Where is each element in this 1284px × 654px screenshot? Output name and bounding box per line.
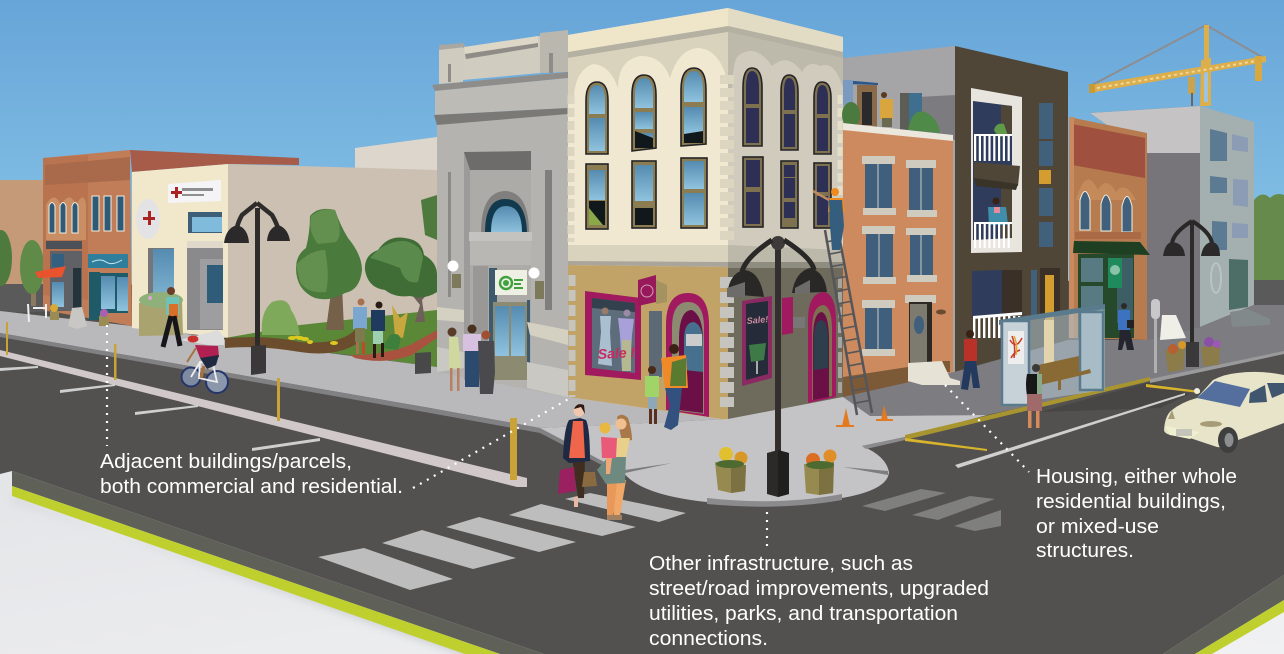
callout: adjacent buildings [100,451,403,498]
child and man with backpack entering shop [645,344,688,430]
bus stop sign, sandwich board, street lamp and planters right [1151,221,1221,373]
curb bollards and cyclist lane divider [0,322,527,487]
ground floor [972,270,1002,318]
scalloped arch band, side face [728,32,843,90]
callout: housing [1036,466,1237,562]
background: far pale building [355,137,437,175]
callout: housing: structures. [1036,540,1134,562]
callout: adjacent buildings: both commercial and residential. [100,476,403,498]
callout: other infrastructure: street/road improvements, upgraded [649,578,989,600]
shop door [649,293,709,417]
ladder and worker [813,188,872,415]
road markings at right [862,351,1284,468]
mother carrying child [597,415,632,520]
crosswalk, right [862,489,1001,531]
trash bin [415,352,431,374]
page ground below the street [0,440,1284,654]
callout: other infrastructure: Other infrastructure, such as [649,553,913,575]
rooftop storey behind orange building [842,46,955,390]
corner building [568,8,843,420]
three people talking [448,324,495,394]
vertical window strip [1039,103,1053,139]
callout: other infrastructure: connections. [649,628,768,650]
sidewalk corner bulb-out [540,397,987,507]
street base with lime edge [0,280,1284,654]
callout: housing: or mixed-use [1036,516,1159,538]
sidewalk: left street [0,311,728,428]
hanging shop sign [638,275,667,306]
planters, corner [715,447,836,495]
street lamp, corner [727,236,827,497]
clinic building [132,164,437,367]
tower crane [1089,25,1266,106]
shop window with mannequins: Sale ! [597,344,636,362]
callout: other infrastructure [649,553,989,650]
left curb [0,333,623,476]
parked car [1164,372,1284,453]
window glass, front [589,71,704,225]
sidewalk: right street [843,305,1284,416]
window glass, side [746,71,828,225]
shopper crossing street [558,404,597,507]
cafe table, sandwich board and planters [28,304,109,329]
man with shoulder bag [1118,303,1134,350]
crosswalk, left [318,493,686,590]
man with backpack at bus stop [1026,364,1042,428]
steps of orange and grey buildings [908,309,1270,385]
street lamp, left [224,203,290,375]
park with trees [225,195,437,367]
cyclist [182,336,228,393]
two men walking in the park [353,298,385,358]
pedestrian with orange bag [163,287,180,347]
bank building [432,30,568,397]
orange brick residential building [843,123,953,397]
dark modern apartment building [955,46,1068,373]
balcony resident [988,198,1008,225]
balcony railings [974,135,1012,161]
far right grey building [1090,106,1254,340]
dotted leader lines [107,325,1029,546]
callout: adjacent buildings: Adjacent buildings/parcels, [100,451,352,473]
callout: housing: Housing, either whole [1036,466,1237,488]
background: far tan building and trees [0,180,50,312]
man in red shirt [961,330,980,390]
traffic cones [836,405,893,427]
bus shelter and bench [999,304,1105,405]
door with porch [909,302,932,363]
brick storefront building, right [1069,117,1150,340]
side shop window, sign and door: Sale! [746,314,769,326]
arched windows, front [586,68,831,229]
callout: housing: residential buildings, [1036,491,1226,513]
parking lines [0,366,320,451]
scalloped arch band, front face [568,32,728,95]
brick commercial building, far left [35,150,299,326]
upper floor quoins [571,75,840,245]
orange building windows [865,163,933,349]
sky [0,0,1284,330]
callout: other infrastructure: utilities, parks, and transportation [649,603,958,625]
shop window with mannequins [585,291,641,380]
far right trees [1254,194,1284,307]
side shop window, sign and door [742,292,836,403]
